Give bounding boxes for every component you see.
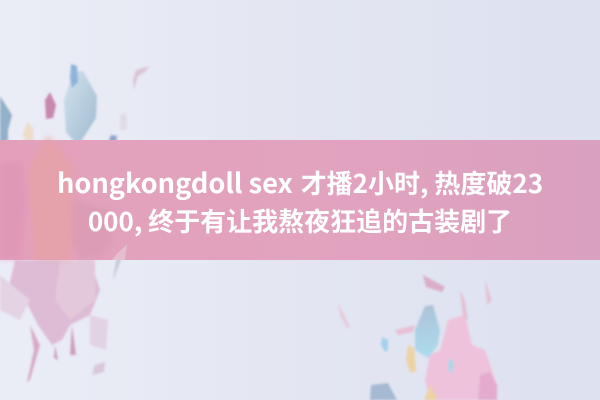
title line 1: hongkongdoll sex 才播2小时, 热度破23 bbox=[57, 161, 543, 201]
pink text band bbox=[0, 140, 600, 260]
upper-left hexagons bbox=[0, 64, 149, 150]
lower-left splash bbox=[0, 245, 126, 382]
artwork visible through band bbox=[0, 135, 112, 260]
title line 2: 000, 终于有让我熬夜狂追的古装剧了 bbox=[88, 202, 512, 239]
lower-right splash bbox=[338, 275, 497, 400]
band shard bbox=[112, 244, 127, 260]
